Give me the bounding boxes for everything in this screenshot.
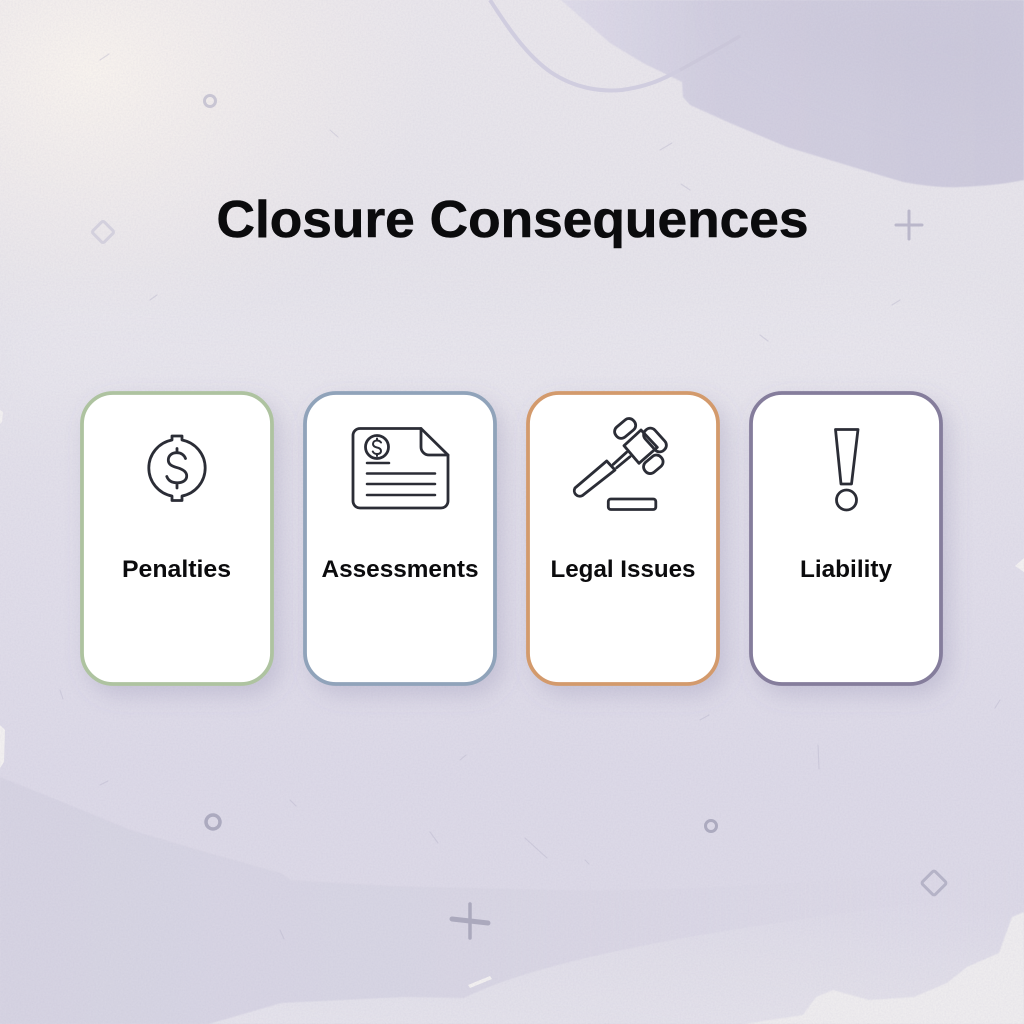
label: legal issues: Legal Issues [550,556,696,583]
decorative arc [490,0,680,90]
panel: penalties [82,393,272,684]
icon: invoice document [353,428,448,508]
panel: assessments [305,393,495,684]
label: penalties: Penalties [122,556,231,583]
label: assessments: Assessments [322,556,478,583]
panel: liability [751,393,941,684]
title: Closure Consequences [216,191,808,249]
label: liability: Liability [800,556,893,583]
icon: gavel [574,416,669,510]
decorative shapes [92,96,947,938]
panel: legal issues [528,393,718,684]
icon: exclamation mark [836,430,858,510]
icon: dollar coin [149,436,205,500]
